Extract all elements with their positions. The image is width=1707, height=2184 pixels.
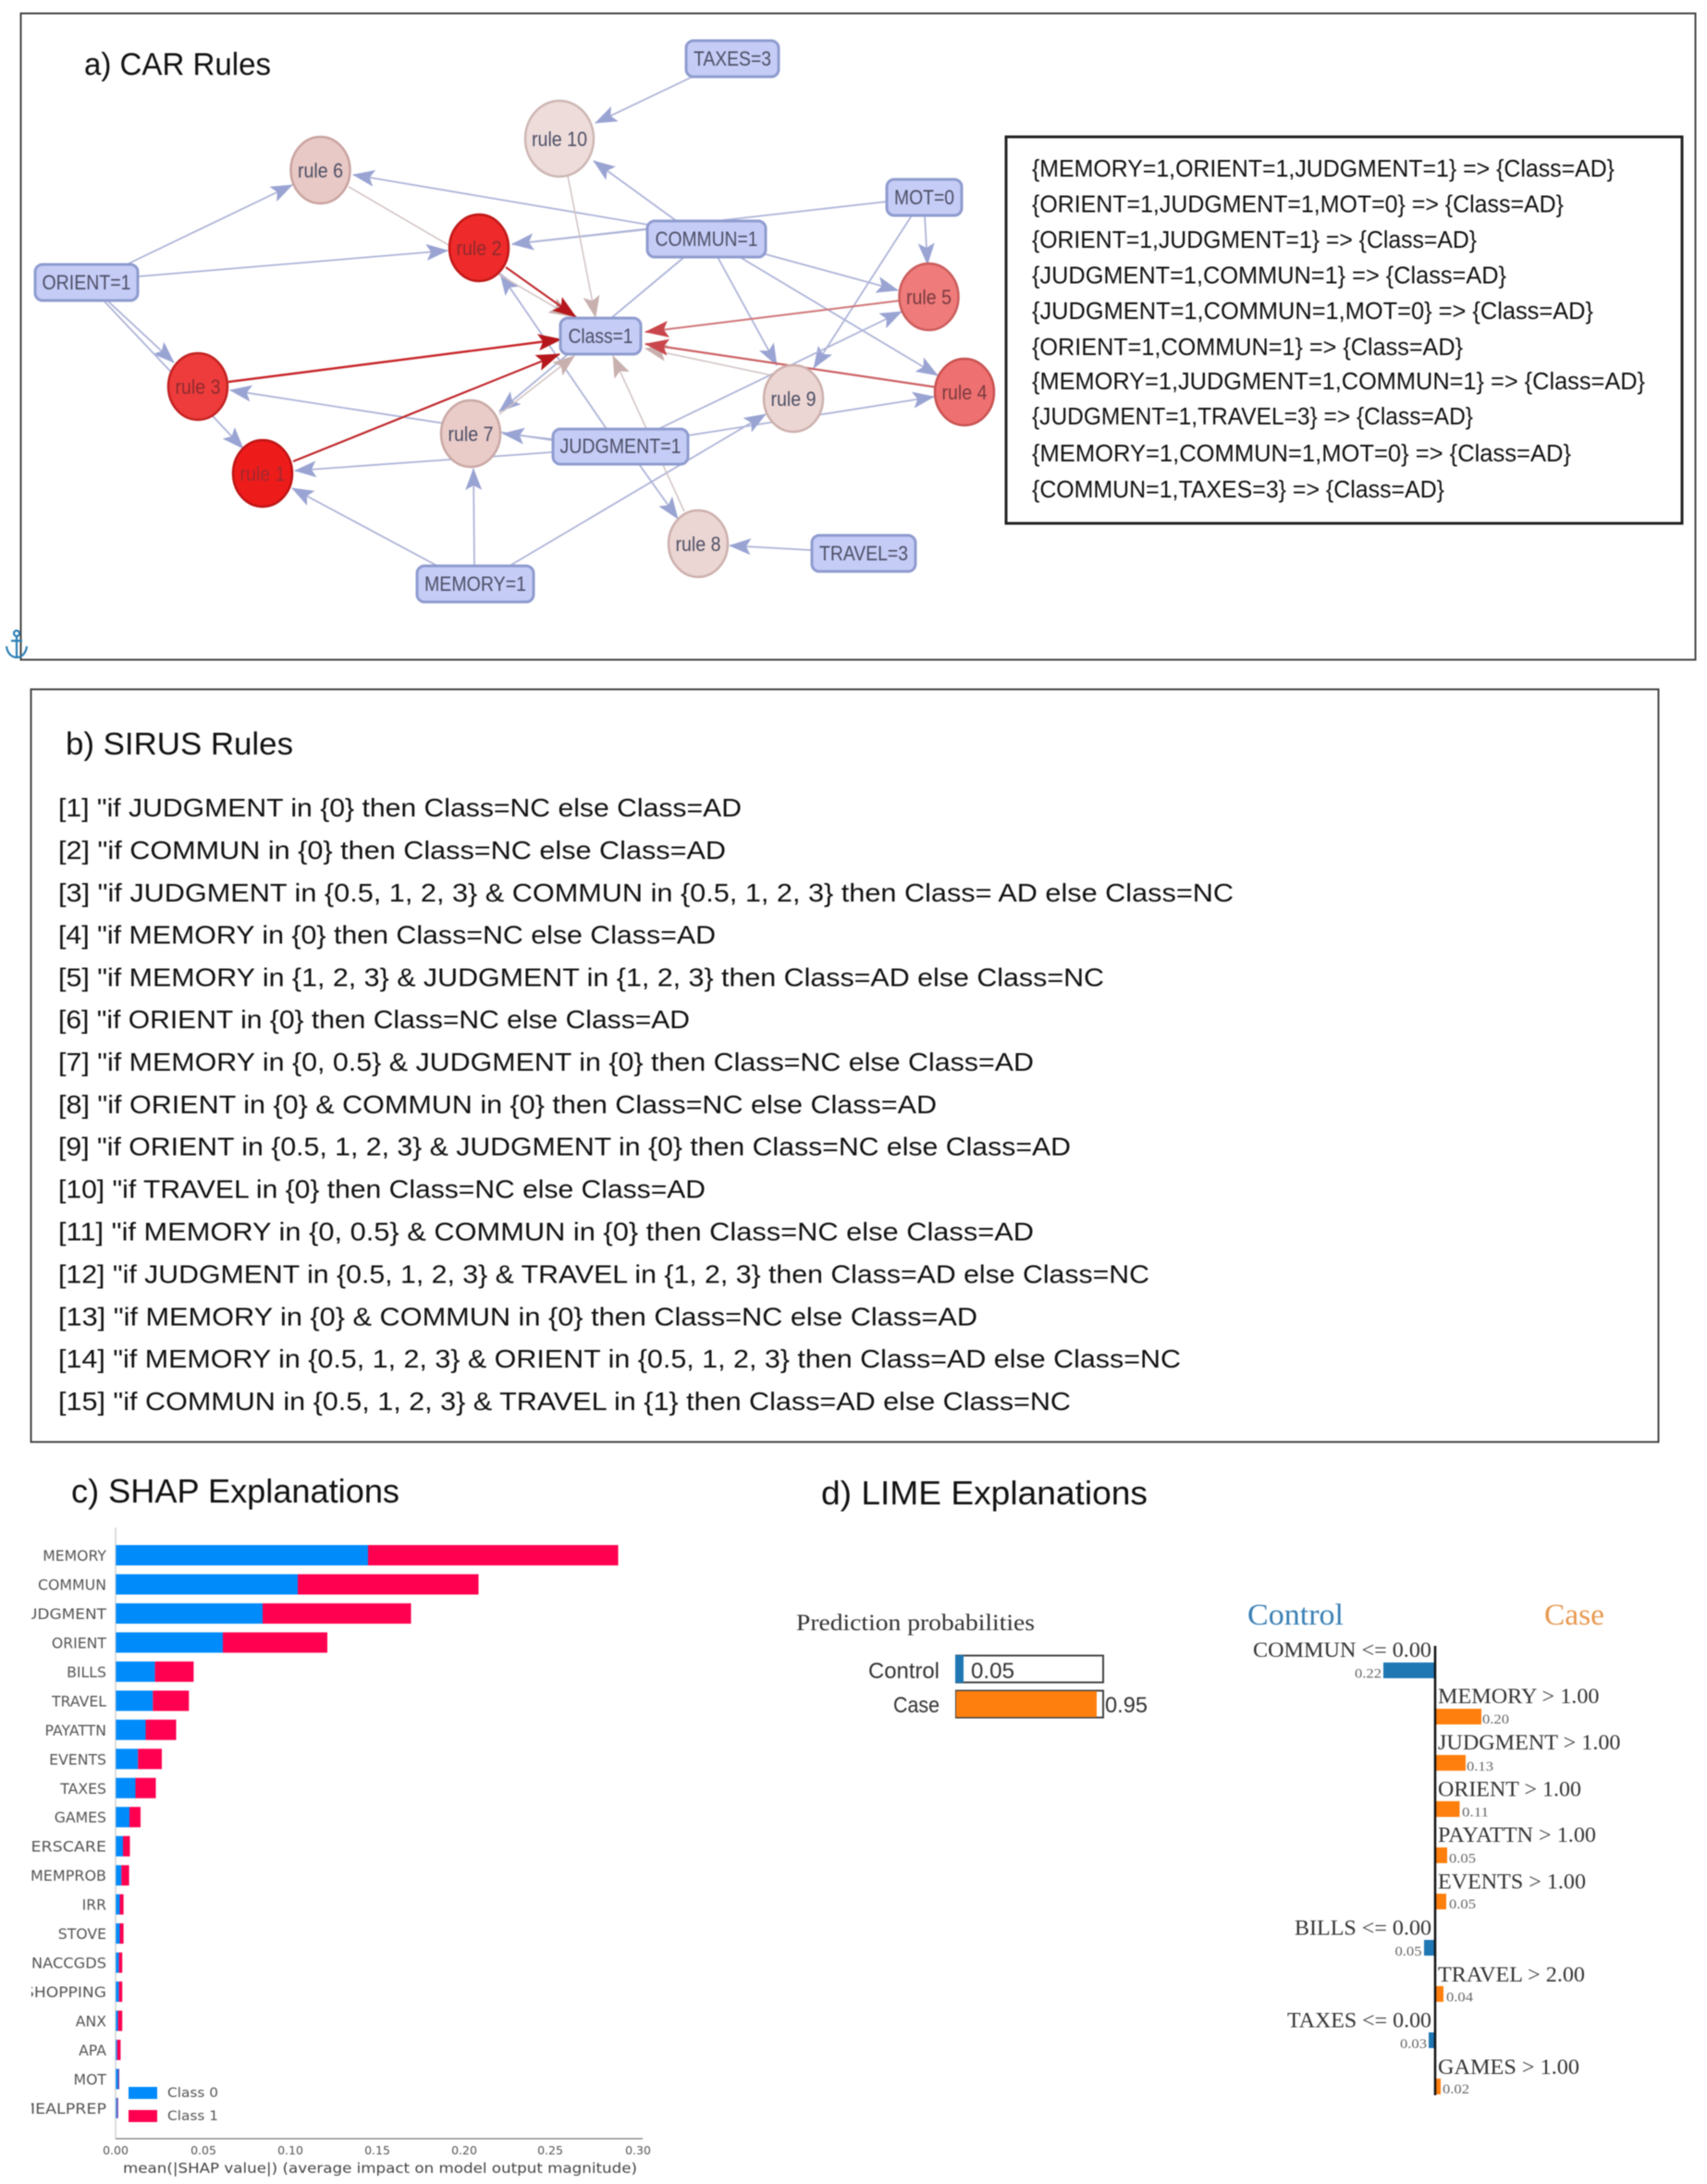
network graph of CAR rules: [35, 41, 994, 602]
x axis: 0.05: [190, 2143, 216, 2157]
text box: association rule list: {MEMORY=1,JUDGMENT=1,COMMUN=1} => {Class=AD}: [1032, 369, 1645, 395]
x axis: 0.25: [537, 2143, 563, 2157]
icon: anchor: [6, 631, 27, 657]
rule list: [5] "if MEMORY in {1, 2, 3} & JUDGMENT in {1, 2, 3} then Class=AD else Class=NC: [58, 963, 1104, 991]
node: TAXES=3: TAXES=3: [694, 47, 771, 70]
legend: [129, 2086, 218, 2124]
feature weights: 0.05: [1394, 1945, 1422, 1959]
node: JUDGMENT=1: JUDGMENT=1: [560, 435, 681, 458]
node: rule 9: rule 9: [771, 387, 816, 411]
class 1 bars: [117, 1545, 619, 2118]
x axis: mean(|SHAP value|) (average impact on model output magnitude): [123, 2160, 637, 2177]
node: MOT=0: [887, 179, 962, 215]
rule list: [8] "if ORIENT in {0} & COMMUN in {0} then Class=NC else Class=AD: [58, 1090, 937, 1119]
rule list: [58, 793, 1234, 1416]
rule list: [15] "if COMMUN in {0.5, 1, 2, 3} & TRAVEL in {1} then Class=AD else Class=NC: [58, 1387, 1071, 1416]
feature rule labels: ORIENT > 1.00: [1438, 1777, 1581, 1801]
node: rule 7: [441, 400, 500, 467]
node: Class=1: Class=1: [568, 325, 632, 348]
node: rule 9: [764, 365, 823, 432]
feature weights: 0.22: [1355, 1666, 1382, 1681]
feature labels: JUDGMENT: [20, 1605, 106, 1623]
feature rule labels: EVENTS > 1.00: [1438, 1870, 1586, 1894]
heading: a) CAR Rules: a) CAR Rules: [84, 47, 271, 82]
feature labels: GAMES: [55, 1809, 106, 1826]
node: rule 3: rule 3: [176, 375, 220, 399]
node: rule 5: rule 5: [906, 286, 952, 309]
panel: SIRUS rules: [31, 690, 1659, 1442]
feature labels: MEMORY: [43, 1547, 106, 1564]
node: COMMUN=1: [647, 221, 766, 257]
feature contribution chart: Control: [1247, 1599, 1344, 1632]
text box: association rule list: {JUDGMENT=1,COMMUN=1,MOT=0} => {Class=AD}: [1032, 299, 1593, 325]
node: ORIENT=1: [35, 264, 138, 301]
text box: association rule list: {JUDGMENT=1,COMMUN=1} => {Class=AD}: [1032, 263, 1506, 288]
prediction probabilities chart: 0.05: [971, 1659, 1014, 1684]
feature weights: 0.02: [1443, 2082, 1469, 2097]
x axis: 0.30: [625, 2143, 651, 2157]
x axis: 0.00: [103, 2143, 129, 2157]
control bars: [1383, 1663, 1435, 2048]
panel: SHAP explanations: [20, 1472, 651, 2177]
feature labels: ANX: [76, 2012, 106, 2031]
node: rule 2: [449, 215, 509, 281]
node: TAXES=3: [686, 41, 779, 77]
x axis: 0.20: [451, 2143, 477, 2157]
text box: association rule list: {MEMORY=1,ORIENT=1,JUDGMENT=1} => {Class=AD}: [1032, 156, 1615, 182]
feature labels: COMMUN: [38, 1576, 106, 1594]
node: rule 8: rule 8: [675, 533, 721, 556]
feature rule labels: PAYATTN > 1.00: [1438, 1823, 1596, 1847]
node: Class=1: [560, 318, 641, 354]
feature labels: TRAVEL: [51, 1692, 106, 1710]
panel: CAR rules: [6, 13, 1696, 660]
rule list: [7] "if MEMORY in {0, 0.5} & JUDGMENT in {0} then Class=NC else Class=AD: [58, 1048, 1034, 1076]
feature labels: IRR: [82, 1896, 106, 1914]
prediction probabilities chart: [796, 1611, 1148, 1718]
node: TRAVEL=3: [812, 535, 915, 571]
class 0 bars: [116, 1545, 368, 2118]
heading: b) SIRUS Rules: b) SIRUS Rules: [66, 727, 293, 762]
node: TRAVEL=3: TRAVEL=3: [819, 542, 908, 565]
feature rule labels: BILLS <= 0.00: [1295, 1916, 1431, 1940]
case bars: [1436, 1709, 1481, 2094]
x axis: 0.15: [364, 2143, 390, 2157]
legend: Class 0: [167, 2086, 218, 2101]
feature weights: 0.03: [1400, 2037, 1427, 2052]
node: MEMORY=1: MEMORY=1: [424, 572, 526, 595]
text box: association rule list: [1006, 137, 1682, 523]
node: rule 3: [168, 353, 227, 420]
node: rule 10: rule 10: [532, 128, 587, 151]
feature labels: PERSCARE: [21, 1838, 106, 1856]
feature labels: PAYATTN: [45, 1722, 106, 1739]
feature rule labels: COMMUN <= 0.00: [1253, 1638, 1431, 1662]
feature contribution chart: Case: [1544, 1599, 1604, 1632]
feature weights: 0.13: [1467, 1760, 1493, 1774]
feature rule labels: MEMORY > 1.00: [1438, 1685, 1600, 1708]
feature labels: MEMPROB: [31, 1867, 106, 1884]
feature labels: APA: [79, 2042, 106, 2059]
feature rule labels: TRAVEL > 2.00: [1438, 1963, 1585, 1986]
node: ORIENT=1: ORIENT=1: [43, 271, 131, 294]
panel: LIME explanations: [796, 1474, 1620, 2097]
node: rule 4: rule 4: [941, 381, 988, 404]
prediction probabilities chart: Prediction probabilities: [796, 1611, 1035, 1636]
edges: antecedent to rule: [104, 76, 938, 566]
text box: association rule list: {JUDGMENT=1,TRAVEL=3} => {Class=AD}: [1032, 404, 1473, 430]
feature weights: 0.11: [1462, 1805, 1489, 1820]
bar chart: mean absolute SHAP value by feature: [20, 1528, 651, 2177]
text box: association rule list: {ORIENT=1,JUDGMENT=1} => {Class=AD}: [1032, 227, 1477, 253]
rule list: [9] "if ORIENT in {0.5, 1, 2, 3} & JUDGMENT in {0} then Class=NC else Class=AD: [58, 1133, 1071, 1161]
text box: association rule list: {ORIENT=1,COMMUN=1} => {Class=AD}: [1032, 335, 1463, 361]
edges: strong rule to class: [228, 267, 938, 461]
feature labels: ORIENT: [52, 1634, 106, 1651]
feature labels: STOVE: [58, 1925, 106, 1943]
node: rule 2: rule 2: [457, 237, 501, 260]
rule list: [4] "if MEMORY in {0} then Class=NC else Class=AD: [58, 921, 716, 950]
prediction probabilities chart: Control: [868, 1659, 939, 1684]
rule list: [3] "if JUDGMENT in {0.5, 1, 2, 3} & COMMUN in {0.5, 1, 2, 3} then Class= AD else Class=NC: [58, 878, 1234, 907]
rule list: [12] "if JUDGMENT in {0.5, 1, 2, 3} & TRAVEL in {1, 2, 3} then Class=AD else Class=NC: [58, 1259, 1149, 1288]
feature rule labels: JUDGMENT > 1.00: [1438, 1731, 1620, 1754]
feature labels: TAXES: [59, 1780, 106, 1798]
text box: association rule list: {MEMORY=1,COMMUN=1,MOT=0} => {Class=AD}: [1032, 441, 1571, 467]
node: rule 7: rule 7: [448, 423, 494, 446]
node: rule 6: rule 6: [298, 159, 343, 182]
node: rule 4: [935, 359, 994, 425]
rule list: [11] "if MEMORY in {0, 0.5} & COMMUN in {0} then Class=NC else Class=AD: [58, 1217, 1034, 1246]
node: MEMORY=1: [417, 566, 534, 602]
text box: association rule list: {ORIENT=1,JUDGMENT=1,MOT=0} => {Class=AD}: [1032, 192, 1564, 218]
node: rule 6: [290, 137, 350, 203]
text box: association rule list: {COMMUN=1,TAXES=3} => {Class=AD}: [1032, 477, 1444, 503]
feature contribution chart: [1247, 1599, 1620, 2097]
node: MOT=0: MOT=0: [894, 186, 954, 209]
feature rule labels: TAXES <= 0.00: [1287, 2008, 1431, 2032]
legend: Class 1: [167, 2109, 218, 2124]
feature labels: [31, 1550, 107, 2115]
heading: c) SHAP Explanations: c) SHAP Explanations: [71, 1472, 399, 1510]
node: COMMUN=1: COMMUN=1: [655, 227, 758, 251]
feature labels: SHOPPING: [24, 1983, 106, 2001]
node: rule 1: [233, 440, 292, 507]
feature labels: NACCGDS: [31, 1955, 106, 1972]
x axis: 0.10: [277, 2143, 303, 2157]
edges: weak rule to class: [349, 176, 772, 511]
feature weights: 0.04: [1446, 1990, 1474, 2005]
node: JUDGMENT=1: [553, 429, 688, 464]
rule list: [10] "if TRAVEL in {0} then Class=NC else Class=AD: [58, 1175, 706, 1204]
feature rule labels: GAMES > 1.00: [1438, 2055, 1579, 2079]
node: rule 8: [669, 510, 728, 577]
rule list: [2] "if COMMUN in {0} then Class=NC else Class=AD: [58, 836, 726, 865]
rule list: [13] "if MEMORY in {0} & COMMUN in {0} then Class=NC else Class=AD: [58, 1302, 977, 1331]
rule list: [6] "if ORIENT in {0} then Class=NC else Class=AD: [58, 1005, 690, 1034]
feature labels: MOT: [74, 2071, 106, 2088]
x axis: [103, 2139, 651, 2177]
feature labels: BILLS: [67, 1663, 106, 1681]
node: rule 10: [525, 101, 594, 177]
prediction probabilities chart: 0.95: [1105, 1693, 1148, 1718]
node: rule 1: rule 1: [240, 462, 285, 485]
feature weights: [1355, 1666, 1509, 2097]
feature weights: 0.20: [1482, 1712, 1509, 1727]
feature labels: EVENTS: [49, 1750, 106, 1768]
feature rule labels: [1253, 1638, 1620, 2079]
rule list: [1] "if JUDGMENT in {0} then Class=NC else Class=AD: [58, 793, 742, 822]
feature weights: 0.05: [1449, 1897, 1476, 1912]
feature weights: 0.05: [1449, 1851, 1476, 1866]
prediction probabilities chart: Case: [893, 1693, 939, 1718]
heading: d) LIME Explanations: d) LIME Explanations: [821, 1474, 1148, 1512]
rule list: [14] "if MEMORY in {0.5, 1, 2, 3} & ORIENT in {0.5, 1, 2, 3} then Class=AD else Class=NC: [58, 1344, 1181, 1373]
feature labels: MEALPREP: [21, 2100, 106, 2117]
node: rule 5: [899, 264, 958, 330]
